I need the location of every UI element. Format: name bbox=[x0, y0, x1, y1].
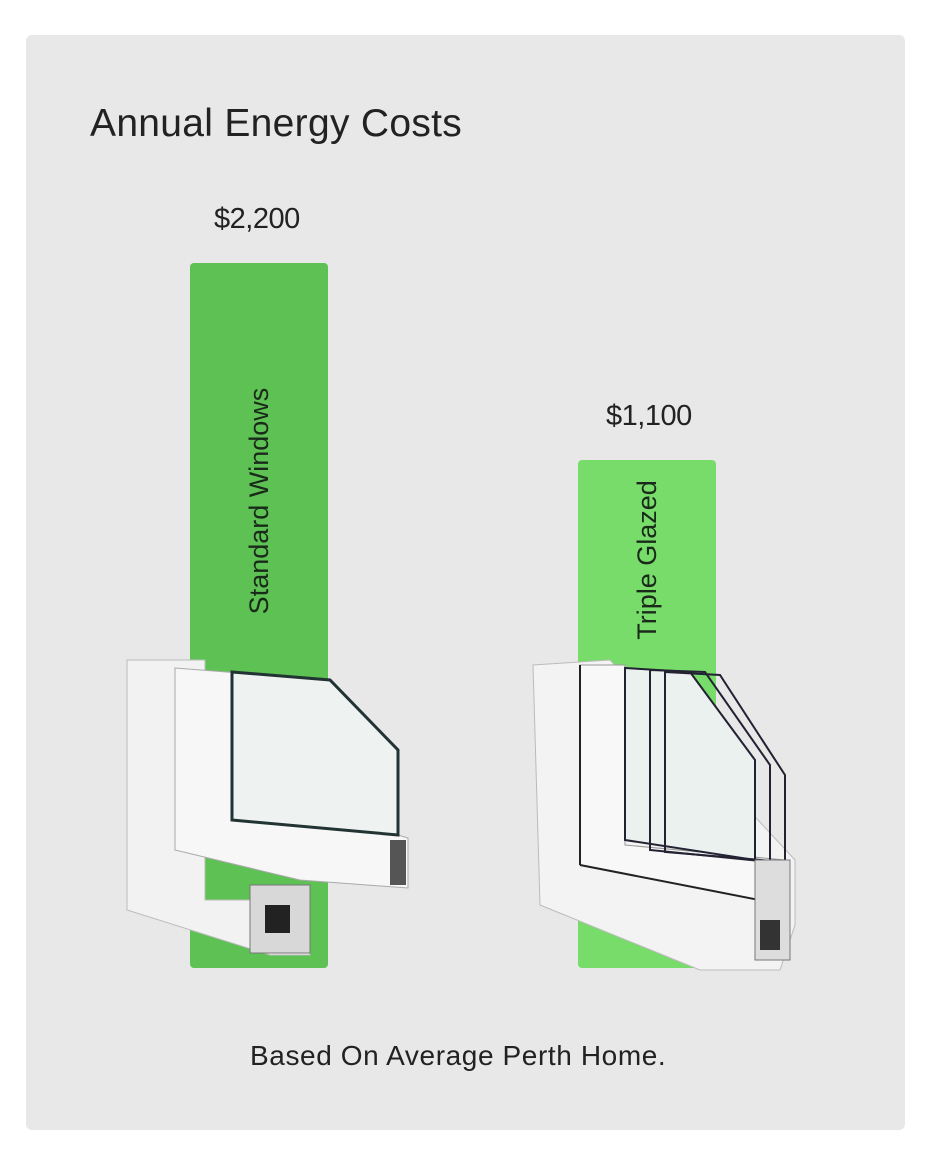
bar label: triple: Triple Glazed bbox=[632, 480, 662, 640]
bar: standard windows bbox=[190, 263, 328, 968]
icon: standard window frame bbox=[127, 660, 408, 955]
title: Annual Energy Costs bbox=[90, 102, 462, 145]
value label: triple: $1,100 bbox=[606, 400, 692, 432]
value label: standard: $2,200 bbox=[214, 203, 300, 235]
icon: triple glazed window frame bbox=[533, 660, 795, 970]
bar label: standard: Standard Windows bbox=[244, 388, 274, 614]
bar: triple glazed bbox=[578, 460, 716, 968]
footnote: Based On Average Perth Home. bbox=[250, 1040, 666, 1071]
